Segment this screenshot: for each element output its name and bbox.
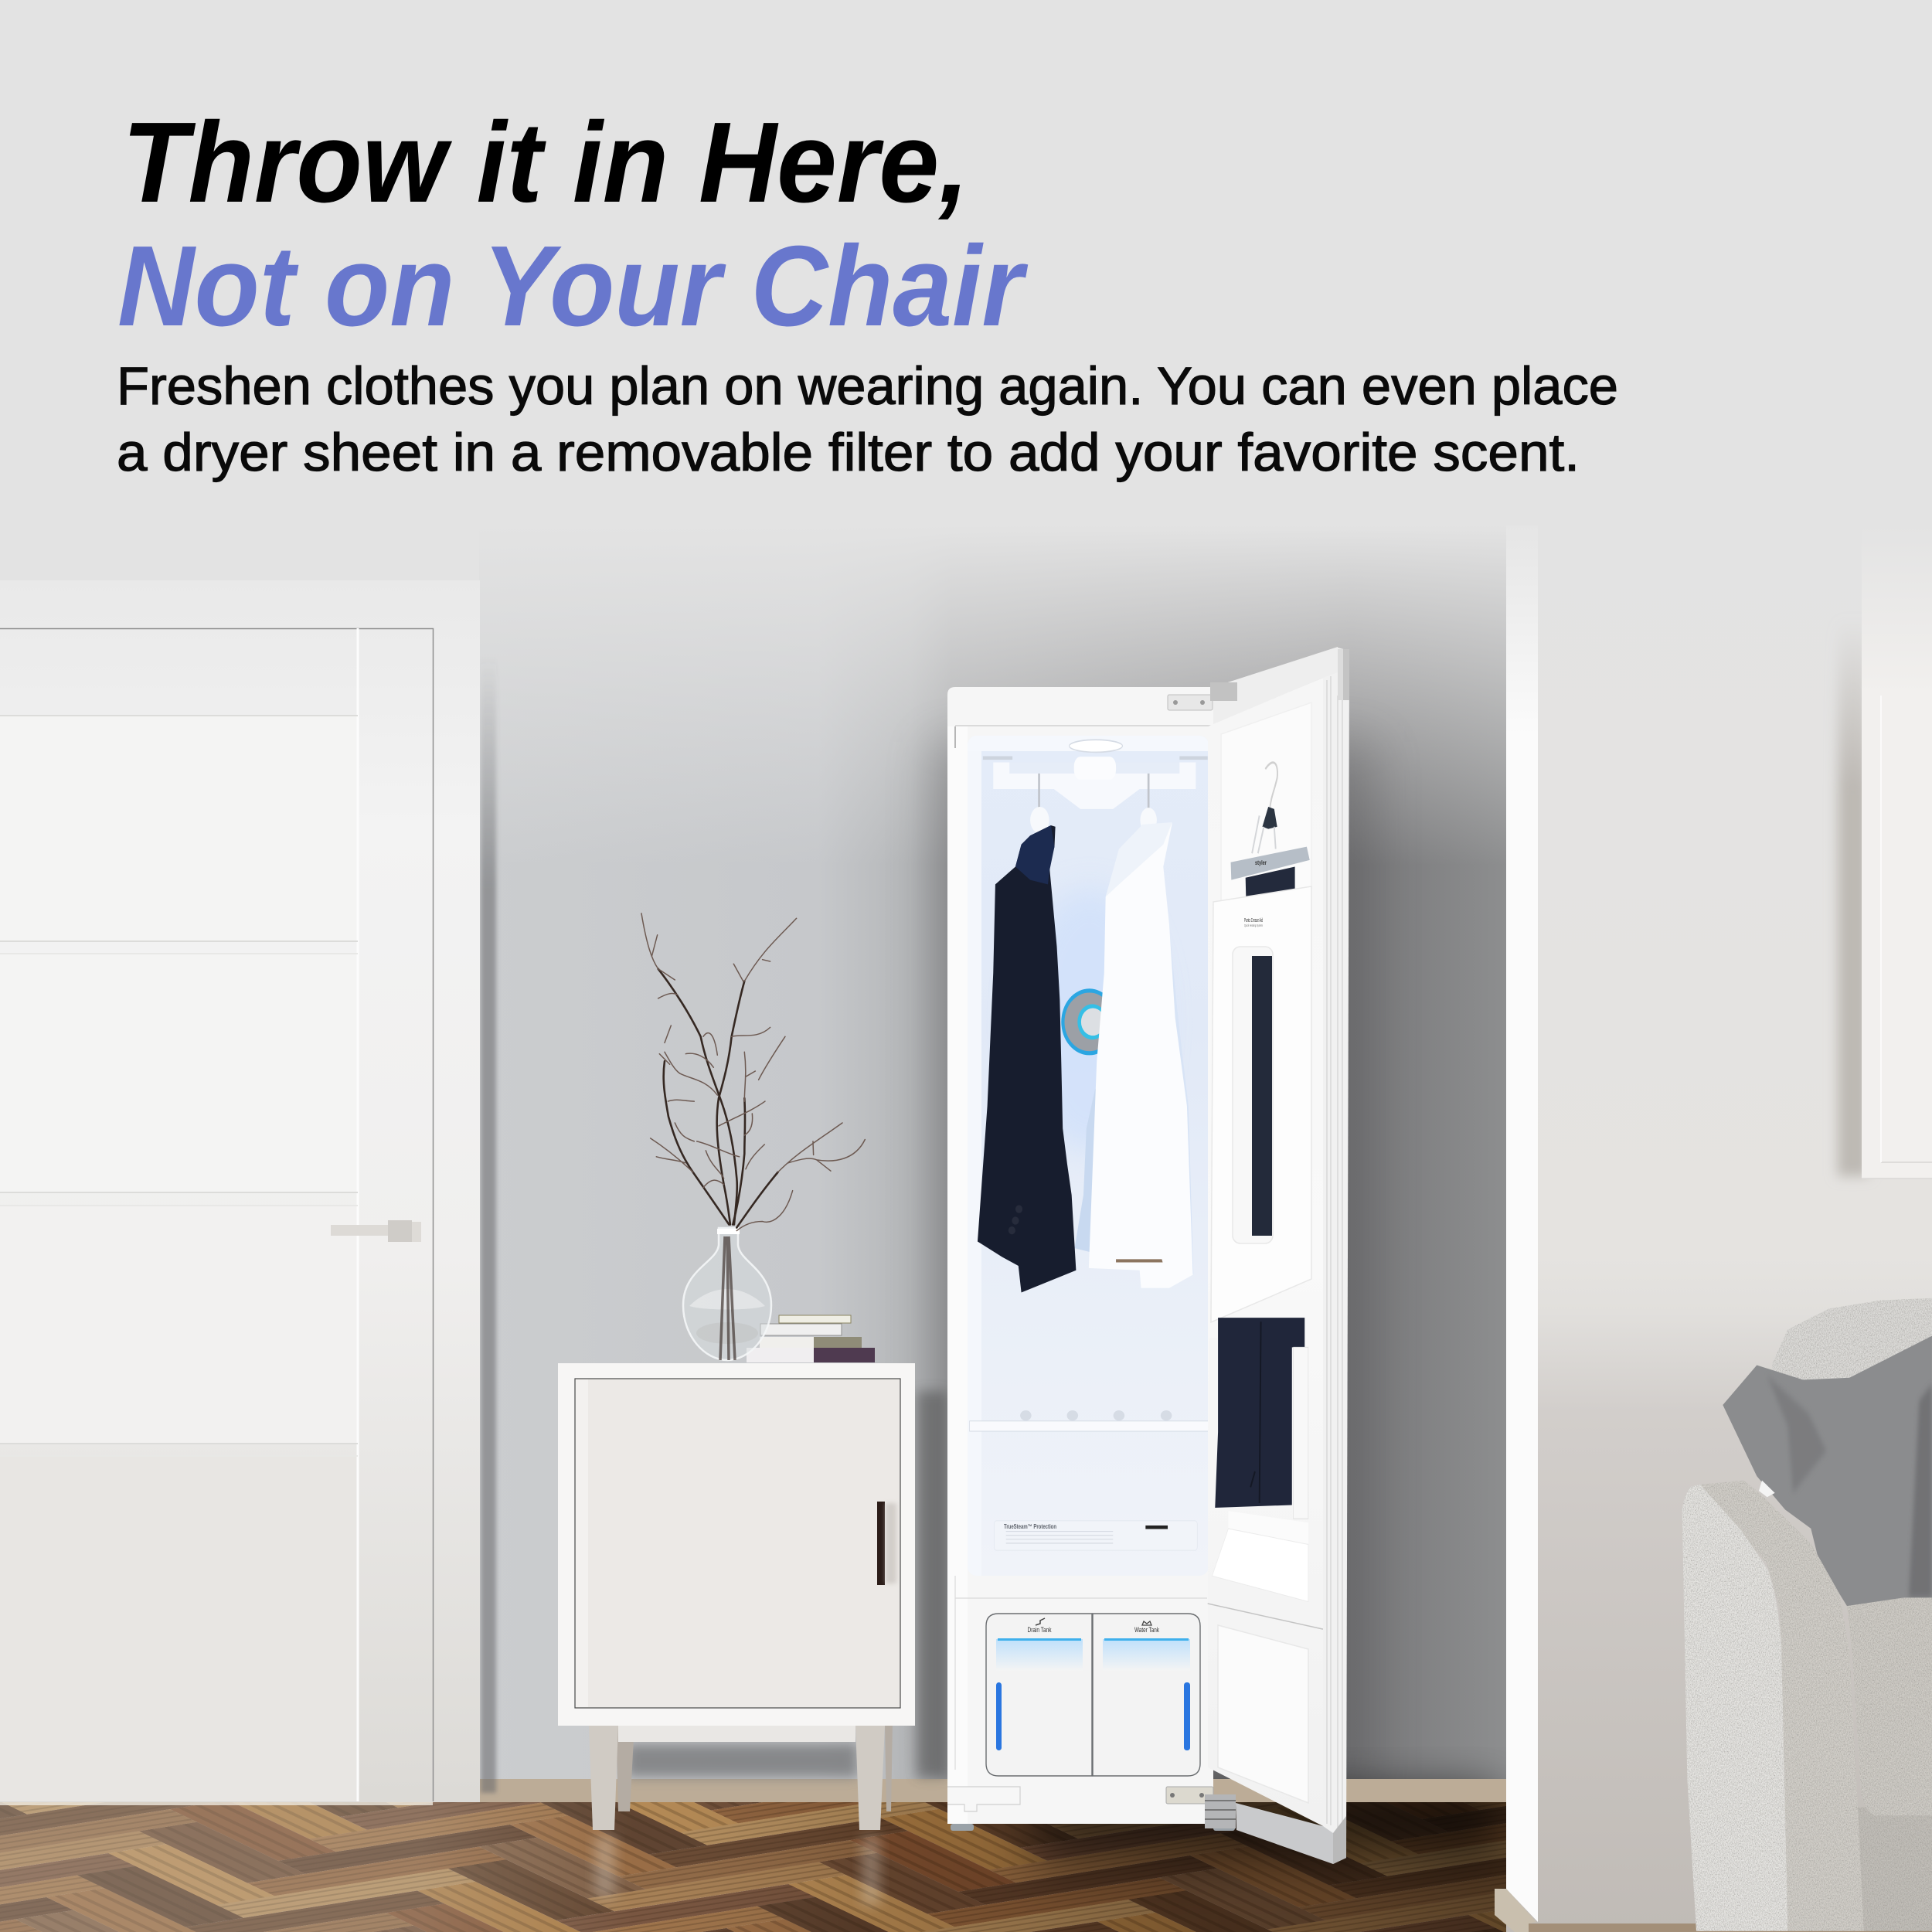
lower body divider <box>955 1576 1207 1770</box>
steamer <box>947 647 1349 1864</box>
back cushion <box>1772 1298 1932 1409</box>
water tank <box>1093 1614 1200 1776</box>
pants crease panel <box>1211 886 1311 1322</box>
steamer body <box>947 687 1213 1824</box>
pants hanger <box>1231 847 1310 902</box>
door upper inset <box>1221 702 1311 904</box>
right wall <box>1495 526 1932 1932</box>
title: Not on Your Chair <box>117 223 1029 350</box>
steamer interior <box>981 751 1208 1492</box>
cabinet body <box>558 1363 915 1726</box>
pants crease panel: Pants Crease Aid <box>1244 918 1263 923</box>
cabinet shadow <box>626 1391 947 1777</box>
cabinet door <box>575 1379 900 1708</box>
apron <box>618 1726 855 1742</box>
title <box>117 99 1029 350</box>
sofa <box>1682 1298 1932 1931</box>
lower door panel <box>1218 1625 1308 1803</box>
pillow <box>1723 1336 1932 1606</box>
jacket <box>978 825 1076 1292</box>
seat base <box>1855 1807 1932 1931</box>
bottom hinge <box>1166 1787 1236 1828</box>
body text <box>117 356 1618 482</box>
wall corner column <box>1506 526 1538 1922</box>
door top face <box>1213 647 1338 725</box>
door bottom face <box>1236 1803 1333 1864</box>
seat cushion <box>1847 1597 1932 1815</box>
interior label: TrueSteam™ Protection <box>1004 1523 1056 1530</box>
door shelf <box>1208 1511 1323 1629</box>
books <box>747 1315 875 1362</box>
shelf rack <box>970 1410 1209 1550</box>
back legs <box>616 1723 893 1811</box>
trousers <box>1209 1318 1308 1519</box>
arm side <box>1700 1481 1864 1931</box>
steam fan disc <box>1061 988 1117 1055</box>
baseboard <box>479 1779 1507 1802</box>
panel: water tanks <box>986 1614 1200 1776</box>
door frame shadow <box>481 657 496 1793</box>
door inner face <box>1208 678 1323 1826</box>
body text: Freshen clothes you plan on wearing again. You can even place <box>117 356 1618 416</box>
frame shadow <box>1838 618 1869 1176</box>
right skirting <box>1495 1889 1932 1932</box>
body text: a dryer sheet in a removable filter to add your favorite scent. <box>117 423 1580 482</box>
vase <box>683 1228 771 1360</box>
back wall <box>479 526 1507 1793</box>
top hinge <box>1168 682 1237 710</box>
wall picture frame <box>1862 526 1932 1179</box>
drain tank <box>986 1614 1092 1776</box>
floor <box>0 1793 1507 1932</box>
cabinet handle <box>877 1502 885 1585</box>
hanger label: styler <box>1255 859 1267 866</box>
door gasket <box>1323 648 1349 1864</box>
front legs <box>589 1726 885 1830</box>
cabinet <box>558 1363 915 1830</box>
icon: door handle <box>331 1220 421 1242</box>
steam hanger hook <box>1252 763 1277 853</box>
branches <box>641 913 865 1231</box>
pants crease panel: Quick Heating System <box>1244 923 1263 927</box>
steamer wall shadow <box>931 742 1376 1801</box>
top hanger bar <box>983 740 1208 833</box>
feet <box>951 1824 1235 1831</box>
shirt <box>1074 822 1193 1288</box>
drain tank: Drain Tank <box>1028 1626 1052 1634</box>
water tank: Water Tank <box>1134 1626 1159 1634</box>
panel: white door <box>0 580 480 1802</box>
base plate <box>947 1787 1020 1811</box>
arm front <box>1682 1485 1787 1931</box>
title: Throw it in Here, <box>122 99 969 226</box>
